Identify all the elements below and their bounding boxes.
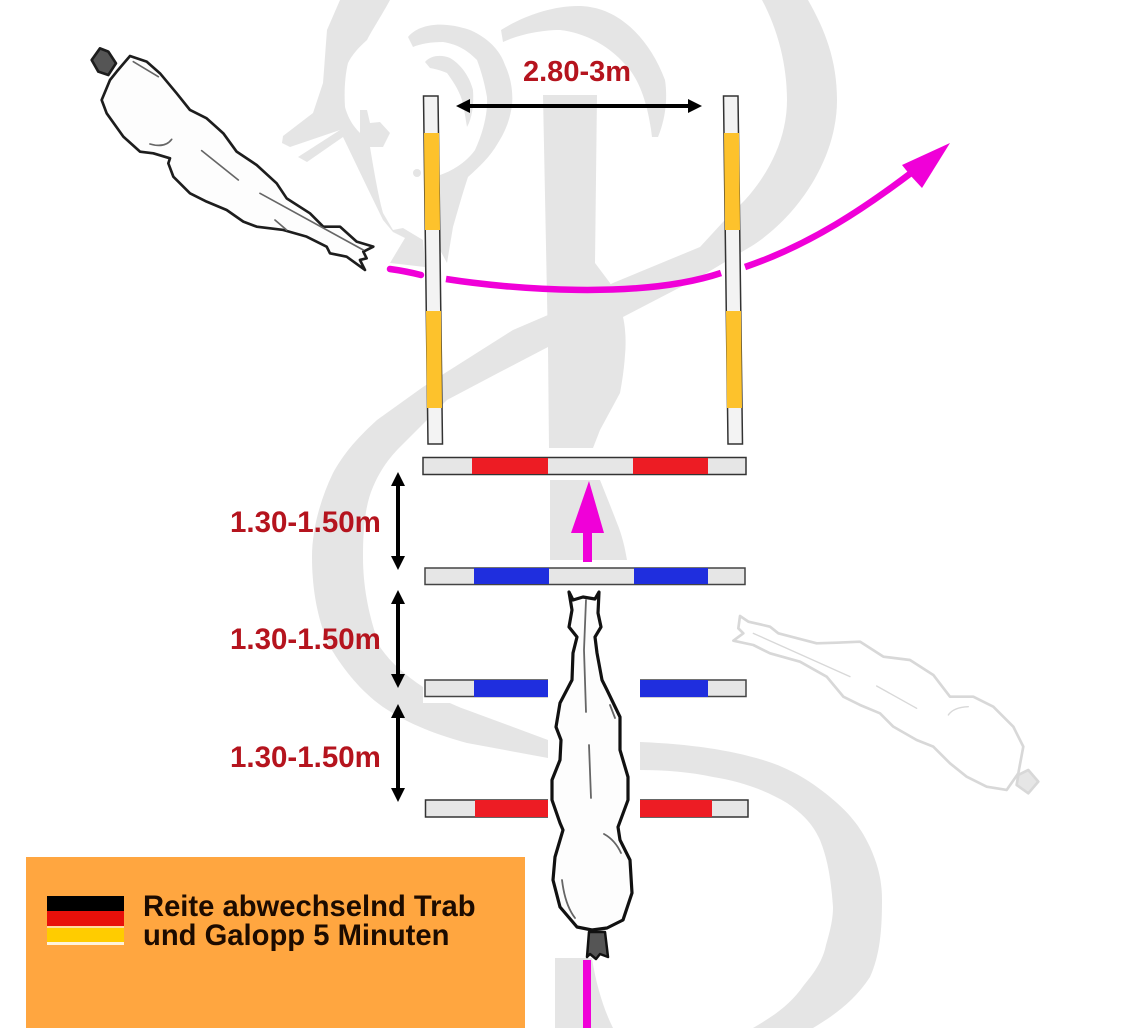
- instruction text: und Galopp 5 Minuten: [143, 920, 449, 952]
- magenta straight arrow: [571, 481, 604, 562]
- pole: blue bar three, split: [425, 680, 746, 697]
- main horse from above: [552, 592, 632, 959]
- ghost horse: faded horse on the right: [733, 616, 1038, 793]
- distance label three: 1.30-1.50m: [230, 741, 381, 774]
- horse tail: [92, 48, 116, 75]
- distance label one: 1.30-1.50m: [230, 506, 381, 539]
- horse inner marks: [133, 62, 363, 250]
- pole: red bar four, split: [426, 800, 748, 817]
- pole: right upright: [724, 96, 742, 444]
- top-left horse from above: [92, 48, 373, 270]
- pole: left upright: [424, 96, 442, 444]
- distance arrows: [391, 472, 405, 802]
- panel: orange instruction box: [26, 857, 525, 1028]
- width label: 2.80-3m: [523, 56, 631, 88]
- width arrow: [456, 99, 702, 113]
- horse tail: [587, 932, 608, 959]
- instruction text: Reite abwechselnd Trab: [143, 891, 476, 923]
- icon: German flag: [47, 896, 124, 945]
- white clearing around horse and poles: [423, 585, 756, 957]
- horse body outline: [552, 592, 632, 930]
- magenta entry line: [583, 960, 591, 1028]
- horse body outline: [102, 56, 373, 270]
- distance label two: 1.30-1.50m: [230, 623, 381, 656]
- background watermark logo: [282, 0, 882, 1028]
- horse inner marks: [562, 600, 621, 918]
- pole: red bar one: [423, 458, 746, 474]
- pole: blue bar two: [425, 568, 745, 584]
- magenta curved route with arrow: [390, 143, 950, 290]
